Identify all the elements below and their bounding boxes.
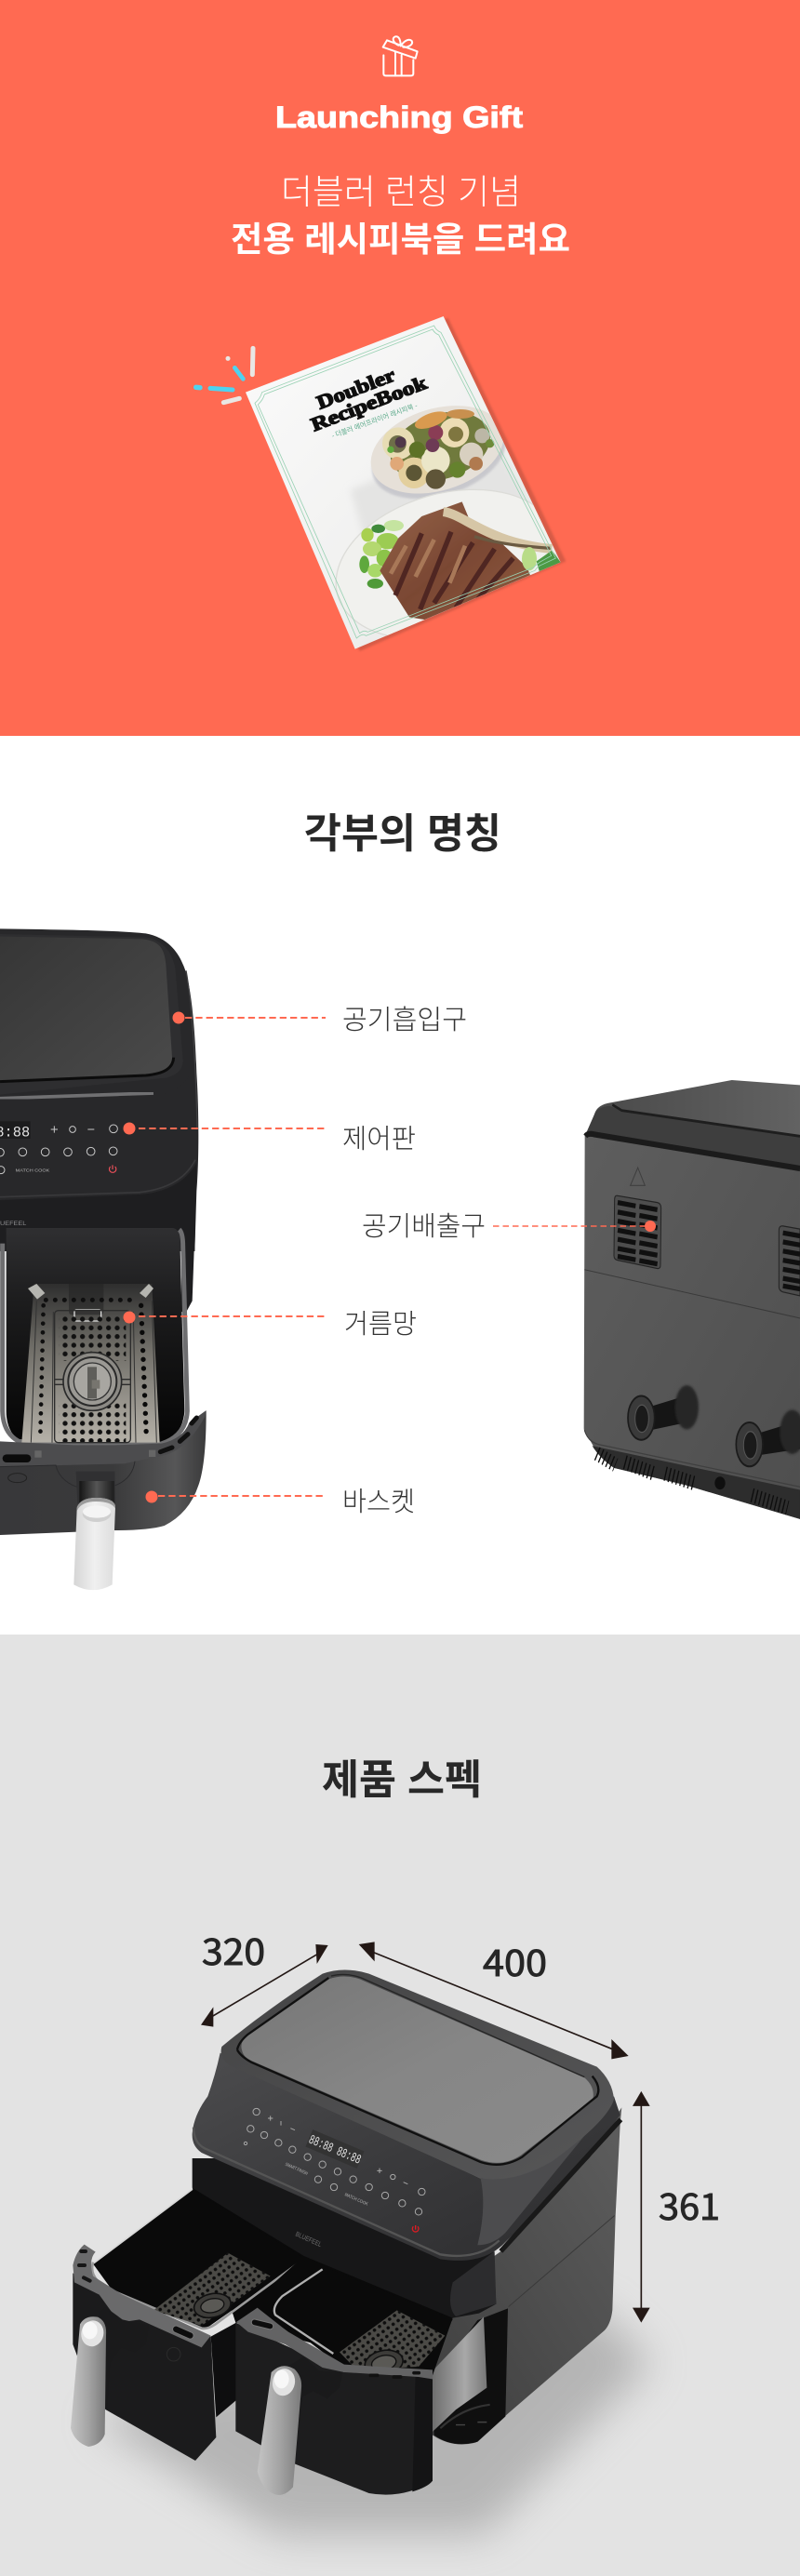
left strainer bbox=[153, 2253, 271, 2326]
heading: product spec: 제품 스펙 bbox=[322, 1757, 482, 1803]
lower shroud bbox=[193, 2158, 496, 2318]
dimension: 400: 400 bbox=[483, 1935, 547, 1986]
callout: strainer bbox=[123, 1310, 417, 1340]
book title: Doubler bbox=[314, 365, 398, 414]
handle bbox=[73, 1472, 115, 1590]
steak bbox=[380, 501, 561, 621]
right strainer bbox=[340, 2310, 445, 2379]
base vents bbox=[593, 1446, 800, 1519]
panel: part names bbox=[0, 736, 800, 1635]
warning icon bbox=[631, 1168, 645, 1185]
callout: air intake bbox=[173, 1005, 467, 1035]
control panel: MATCH COOK bbox=[16, 1168, 50, 1174]
right side housing bbox=[409, 2107, 621, 2444]
strainer bbox=[21, 1284, 160, 1443]
control panel: UEFEEL bbox=[0, 1221, 27, 1227]
right basket bbox=[235, 2267, 453, 2495]
touch buttons bbox=[244, 2108, 425, 2215]
callout: control panel bbox=[123, 1122, 416, 1155]
panel: launching gift bbox=[0, 0, 800, 736]
heading: Launching Gift: Launching Gift bbox=[275, 100, 523, 134]
lower plate bbox=[335, 489, 556, 636]
callout: basket bbox=[145, 1488, 415, 1517]
glass top bbox=[241, 1976, 593, 2163]
basket front bbox=[0, 1411, 207, 1535]
text: recipe book line: 전용 레시피북을 드려요 bbox=[231, 220, 570, 259]
callout: air outlet bbox=[362, 1212, 656, 1242]
lower shroud: BLUEFEEL bbox=[294, 2230, 323, 2249]
dimension: 400 bbox=[359, 1935, 629, 2059]
left basket bbox=[71, 2188, 453, 2461]
callout: air intake: 공기흡입구 bbox=[342, 1005, 467, 1035]
front control housing bbox=[193, 1969, 620, 2261]
callout: control panel: 제어판 bbox=[342, 1125, 416, 1155]
book title: RecipeBook bbox=[309, 373, 431, 435]
dimension: 361: 361 bbox=[659, 2179, 720, 2230]
rear body bbox=[584, 1131, 800, 1519]
front control housing: MATCH COOK bbox=[343, 2192, 369, 2208]
callout: basket: 바스켓 bbox=[342, 1488, 415, 1517]
display: 88:88 88:88 bbox=[306, 2133, 363, 2169]
front control housing: SMART FINISH bbox=[284, 2162, 309, 2177]
icon: sparkle lines bbox=[196, 348, 253, 403]
dimension: 320 bbox=[201, 1924, 328, 2027]
callout: air outlet: 공기배출구 bbox=[362, 1212, 486, 1242]
rear foot posts bbox=[628, 1385, 800, 1466]
left handle bbox=[71, 2307, 149, 2447]
display bbox=[305, 2129, 365, 2169]
green frame bbox=[255, 326, 555, 638]
dimension: 320: 320 bbox=[202, 1924, 265, 1975]
dimension: 361 bbox=[633, 2091, 720, 2323]
book title bbox=[301, 355, 431, 435]
salad bbox=[359, 520, 404, 589]
basket and strainer bbox=[0, 1216, 207, 1590]
text: launch line: 더블러 런칭 기념 bbox=[281, 173, 521, 211]
lid and rim bbox=[593, 1080, 800, 1146]
panel: product spec bbox=[0, 1635, 800, 2576]
upper housing bbox=[0, 928, 198, 1251]
right handle bbox=[258, 2356, 342, 2495]
air fryer front view bbox=[0, 928, 207, 1590]
upper plate bbox=[370, 406, 506, 499]
lid rim bbox=[221, 1969, 614, 2180]
callout: strainer: 거름망 bbox=[344, 1310, 417, 1340]
air fryer back view bbox=[584, 1080, 800, 1519]
book subtitle: - 더블러 에어프라이어 레시피북 - bbox=[330, 400, 419, 440]
floor shadow bbox=[93, 2307, 651, 2535]
right vent bbox=[779, 1226, 800, 1296]
left vent bbox=[614, 1195, 661, 1269]
recipe book bbox=[246, 316, 575, 663]
control panel bbox=[0, 1121, 117, 1227]
heading: part names: 각부의 명칭 bbox=[304, 811, 501, 857]
air fryer with open baskets bbox=[71, 1969, 621, 2495]
icon: gift box bbox=[383, 36, 418, 75]
